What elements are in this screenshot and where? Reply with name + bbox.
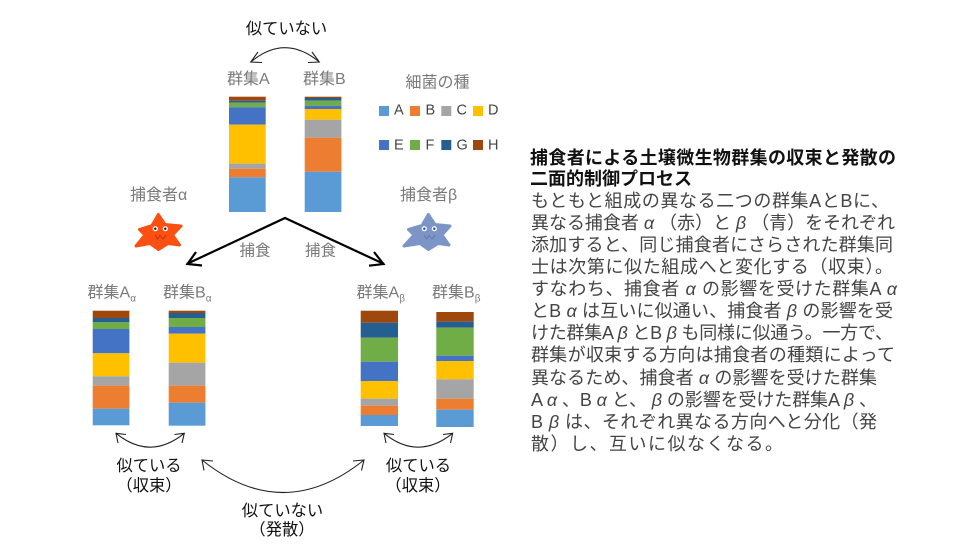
text block: explanation: もともと組成の異なる二つの群集AとBに、: [531, 191, 889, 211]
label: predation left: 捕食: [240, 242, 271, 260]
label: similar, convergence (left): [116, 457, 182, 495]
text block: explanation: 添加すると、同じ捕食者にさらされた群集同: [531, 235, 893, 255]
legend: bacterial species: H: [488, 138, 498, 154]
label: community B beta: 群集B: [432, 284, 475, 302]
text block: explanation: 異なるため、捕食者 α の影響を受けた群集: [531, 368, 877, 388]
legend: bacterial species: G: [456, 138, 468, 154]
label: community A alpha: α: [130, 294, 136, 304]
label: predator alpha: 捕食者α: [130, 186, 187, 204]
text block: explanation: 群集が収束する方向は捕食者の種類によって: [531, 345, 895, 365]
heading: [530, 148, 896, 189]
label: similar, convergence (right): 似ている: [386, 457, 451, 475]
bar: community B: [305, 97, 341, 212]
label: community A alpha: 群集A: [88, 284, 130, 302]
bar: community B beta: [436, 312, 474, 427]
legend: bacterial species: B: [426, 102, 435, 118]
label: not similar (top): 似ていない: [246, 20, 327, 38]
bar: community A alpha: [93, 311, 129, 425]
label: not similar, divergence: 似ていない: [242, 502, 323, 520]
icon: red predator alpha: [136, 214, 181, 250]
legend: bacterial species: F: [426, 138, 434, 154]
label: community B alpha: α: [206, 294, 212, 304]
label: community B: 群集B: [303, 70, 346, 88]
label: community B beta: β: [475, 294, 481, 304]
legend: bacterial species: C: [456, 102, 467, 118]
heading: 二面的制御プロセス: [530, 169, 692, 189]
icon: blue predator beta: [404, 214, 450, 250]
label: similar, convergence (left): （収束）: [116, 477, 182, 495]
text block: explanation: すなわち、捕食者 α の影響を受けた群集A α: [531, 279, 898, 299]
label: not similar, divergence: [242, 502, 323, 539]
text block: explanation: 異なる捕食者 α （赤）と β （青）をそれぞれ: [531, 213, 895, 233]
bar: community B alpha: [169, 311, 205, 426]
label: not similar, divergence: （発散）: [249, 521, 315, 539]
label: similar, convergence (right): （収束）: [385, 477, 451, 495]
legend: bacterial species: A: [394, 102, 404, 118]
arrow: alpha communities similar: [116, 433, 184, 447]
bar: community A beta: [361, 311, 398, 426]
bar: community A: [229, 97, 266, 212]
label: predator beta: 捕食者β: [400, 186, 457, 204]
label: community A beta: 群集A: [356, 284, 399, 302]
arrow: between communities A and B: [251, 48, 319, 62]
legend: bacterial species: E: [394, 138, 404, 154]
text block: explanation: 散）し、互いに似なくなる。: [531, 434, 783, 454]
text block: explanation: とB α は互いに似通い、捕食者 β の影響を受: [531, 301, 893, 321]
arrow: alpha and beta groups not similar: [202, 460, 364, 492]
legend title: 細菌の種: [406, 74, 470, 92]
label: community A: 群集A: [227, 70, 270, 88]
text block: explanation: A α 、B α と、 β の影響を受けた群集A β 、: [531, 390, 877, 410]
label: similar, convergence (left): 似ている: [116, 457, 182, 475]
text block: explanation: [531, 191, 898, 454]
legend: bacterial species: [379, 74, 498, 154]
label: similar, convergence (right): [385, 457, 451, 495]
text block: explanation: B β は、それぞれ異なる方向へと分化（発: [531, 412, 877, 432]
label: community A beta: β: [399, 294, 405, 304]
heading: 捕食者による土壌微生物群集の収束と発散の: [530, 148, 896, 168]
legend: bacterial species: D: [488, 102, 498, 118]
arrow: predation branching left and right: [187, 218, 384, 266]
text block: explanation: けた群集A β とB β も同様に似通う。一方で、: [531, 323, 893, 343]
text block: explanation: 士は次第に似た組成へと変化する（収束）。: [531, 257, 893, 277]
label: predation right: 捕食: [305, 242, 336, 260]
arrow: beta communities similar: [384, 433, 453, 447]
label: community B alpha: 群集B: [163, 284, 206, 302]
